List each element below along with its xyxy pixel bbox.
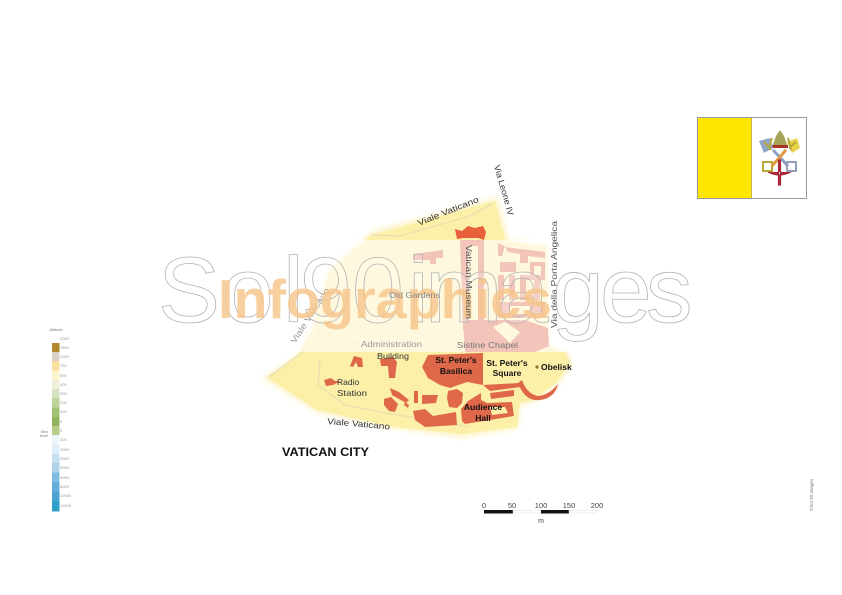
label: st peter's basilica: Basilica: [440, 366, 472, 376]
sea level label: Sea: [40, 429, 48, 434]
label: viale vaticano west: Viale Vaticano: [288, 286, 332, 345]
title: vatican city: VATICAN CITY: [282, 445, 369, 459]
scale numbers: 0: [482, 501, 486, 510]
label: via di porta angelica: Via della Porta Angelica: [549, 221, 559, 328]
scale numbers: 50: [508, 501, 516, 510]
label: vatican gardens: Old Gardens: [389, 290, 440, 300]
label: radio station: Radio: [337, 377, 359, 387]
vatican museums tower: [455, 226, 486, 240]
legend values: 2000: [60, 456, 70, 461]
territory: [267, 201, 570, 434]
watermark: [158, 238, 692, 342]
legend values: 4000: [60, 475, 70, 480]
legend values: 200: [60, 400, 67, 405]
legend values: 1000: [60, 354, 70, 359]
coat of arms: [759, 130, 800, 185]
legend values: 0: [60, 419, 63, 424]
flag divider: [750, 118, 752, 198]
legend values: 1500: [60, 345, 70, 350]
upper keys: [759, 138, 773, 153]
upper right building: north range: [498, 243, 505, 256]
legend values: 5000: [60, 484, 70, 489]
labels showing through the watermark: [389, 245, 474, 319]
vatican museums wing: [460, 240, 484, 330]
scale bar segments: [484, 510, 513, 514]
label: st peter's basilica: [435, 355, 477, 376]
legend values: 11000: [60, 503, 72, 508]
legend values: 10000: [60, 493, 72, 498]
legend values: 500: [60, 373, 67, 378]
scale numbers: 100: [535, 501, 547, 510]
legend values: [60, 336, 72, 508]
label: st peter's square: [486, 358, 528, 378]
map of vatican city: [250, 164, 572, 437]
label: administration building: Administration: [361, 339, 422, 349]
garden buildings: [350, 356, 363, 367]
colonnade strip: [483, 383, 521, 391]
flag yellow field: [698, 118, 752, 198]
obelisk marker: [535, 365, 539, 369]
label: viale vaticano south: Viale Vaticano: [327, 416, 391, 432]
legend colour ramp: [52, 343, 60, 512]
st peter's basilica: [422, 353, 483, 388]
legend values: 300: [60, 391, 67, 396]
elevation legend: [40, 327, 72, 512]
label: station: Station: [337, 388, 367, 398]
label: via leone iv: Via Leone IV: [492, 164, 516, 217]
label: st peter's square: St. Peter's: [486, 358, 528, 368]
watermark: Infographics: Infographics: [218, 268, 552, 330]
flag of vatican city: [698, 118, 806, 198]
label: audience hall: Hall: [475, 413, 491, 423]
washed band: [250, 240, 570, 352]
label: audience hall: Audience: [464, 402, 502, 412]
label: st peter's basilica: St. Peter's: [435, 355, 477, 365]
label: vatican museums: Vatican Museum: [464, 245, 474, 319]
upper right building: courts: [530, 262, 545, 280]
credit: ©Sol 90 Images: [808, 478, 814, 511]
label: sistine chapel: Sistine Chapel: [457, 340, 518, 350]
label: building: Building: [377, 351, 409, 361]
scale numbers: 150: [563, 501, 575, 510]
square arc: [518, 380, 558, 400]
legend values: 2000: [60, 336, 70, 341]
legend values: 3000: [60, 465, 70, 470]
legend title: Altitude: [49, 327, 63, 332]
flag white field: [698, 118, 806, 198]
cord and cross: [768, 160, 791, 185]
scale bar: [482, 501, 603, 525]
tiara: [772, 130, 788, 147]
courtyard in audience hall block: [490, 407, 508, 415]
buildings: [324, 226, 558, 427]
legend values: 750: [60, 363, 67, 368]
lower keys: [763, 162, 772, 171]
label: viale vaticano north: Viale Vaticano: [416, 194, 480, 228]
sistine chapel block: [463, 320, 549, 352]
walls: [269, 204, 492, 427]
scale numbers: 200: [591, 501, 603, 510]
scale unit: m: [538, 518, 544, 525]
sea level label line two: level: [40, 433, 48, 438]
territory glow: [263, 198, 572, 437]
belvedere wing: [413, 250, 443, 264]
legend values: 200: [60, 437, 67, 442]
watermark: Sol90images: Sol90images: [158, 238, 692, 342]
legend values: 400: [60, 382, 67, 387]
legend values: 1000: [60, 447, 70, 452]
label: audience hall: [464, 402, 502, 423]
scale numbers: [482, 501, 603, 510]
legend values: 100: [60, 409, 67, 414]
label: st peter's square: Square: [493, 368, 522, 378]
legend values: 5: [60, 428, 63, 433]
label: obelisk: Obelisk: [541, 362, 572, 372]
